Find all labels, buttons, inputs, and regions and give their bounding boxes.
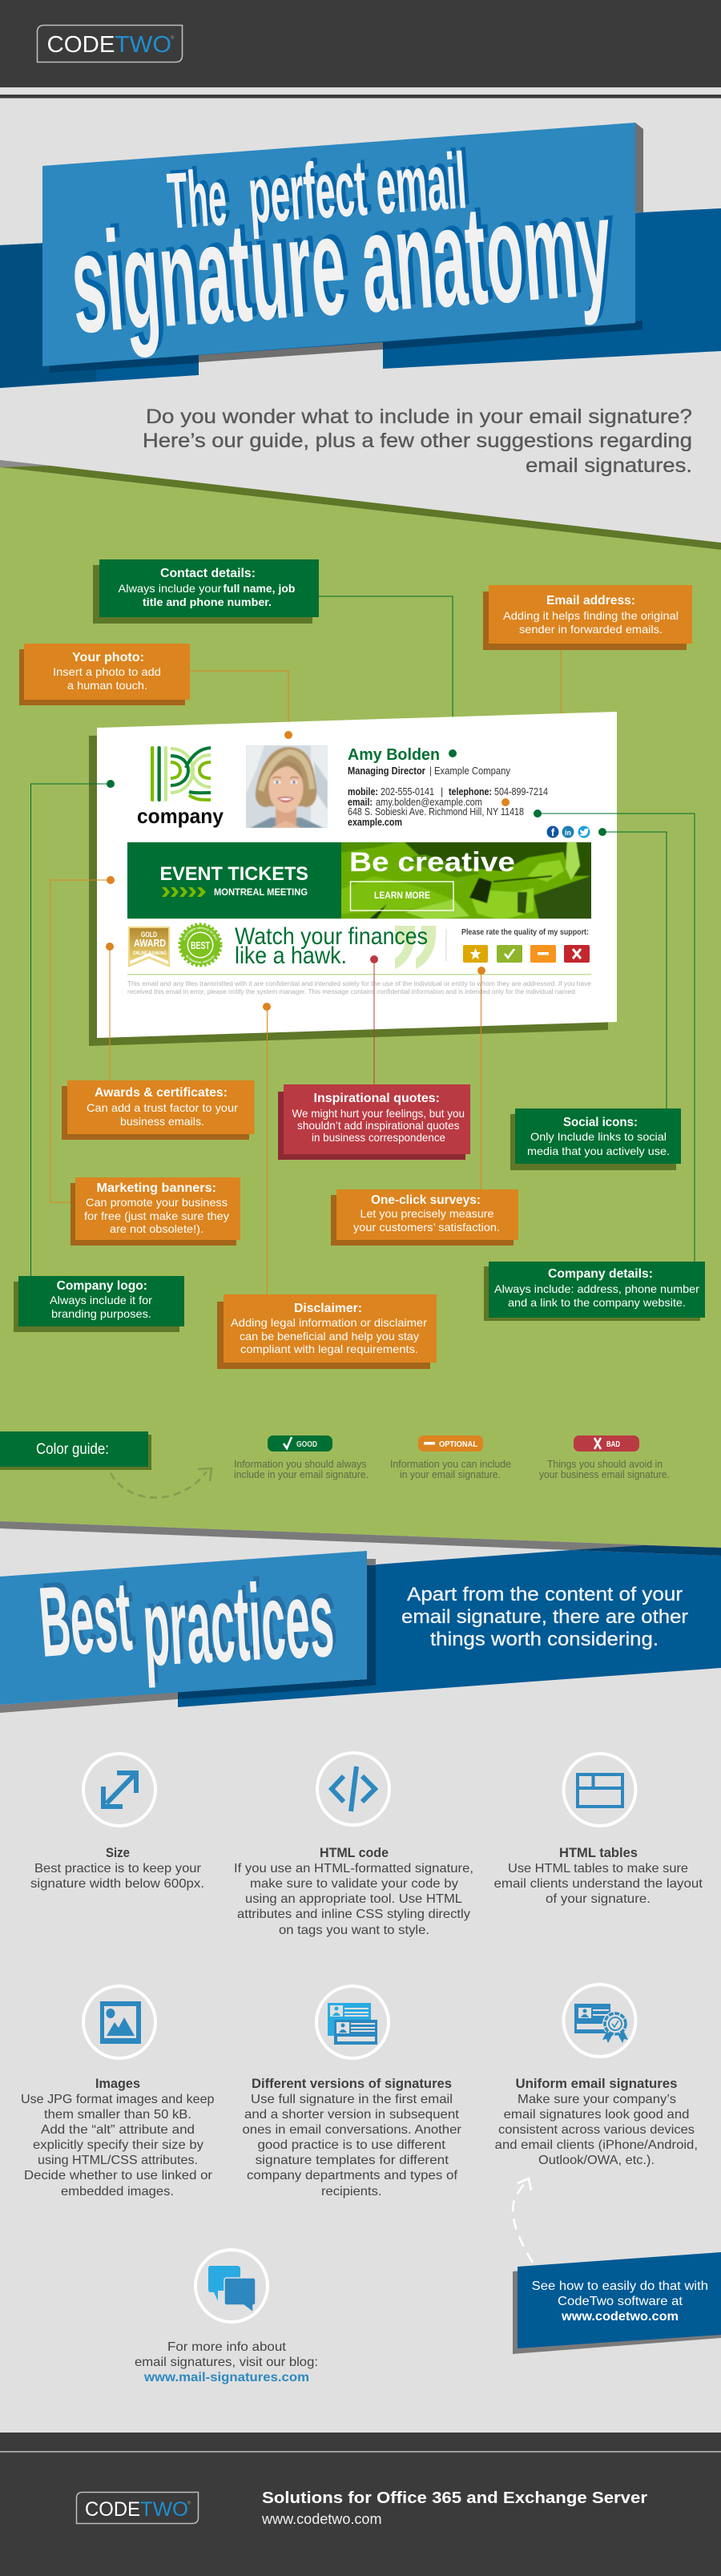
heading: Best practices: Best	[35, 1561, 135, 1678]
practice: images: embedded images.	[61, 2185, 174, 2198]
callout: company details: and a link to the company website.	[508, 1296, 686, 1309]
legend: bad	[539, 1435, 670, 1480]
callout: one-click surveys: One-click surveys:	[371, 1193, 481, 1207]
callout: contact details: Always include your	[119, 582, 222, 595]
callout: awards: Can add a trust factor to your	[87, 1101, 238, 1114]
contact details text	[348, 746, 548, 828]
best seal: BEST	[191, 939, 210, 951]
best practices banner: practices	[143, 1553, 340, 1684]
callout: company logo: branding purposes.	[51, 1307, 151, 1320]
callout: disclaimer: can be beneficial and help you stay	[240, 1330, 419, 1343]
icon: minus button	[530, 945, 556, 963]
practice: html code: on tags you want to style.	[279, 1924, 429, 1937]
contact details text: 648 S. Sobieski Ave. Richmond Hill, NY 11418	[348, 806, 524, 818]
disclaimer text: received this email in error, please notify the system manager. This message contains confidential information and is intended only for the individual named.	[127, 988, 577, 995]
callout: your photo: Insert a photo to add	[53, 665, 161, 678]
connector lines	[190, 596, 561, 802]
legend: bad: BAD	[606, 1439, 620, 1449]
callout: marketing banners: Marketing banners:	[96, 1181, 216, 1195]
social icons: f	[551, 826, 555, 838]
contact details text: |	[441, 786, 443, 797]
callout: inspirational quotes: Inspirational quotes:	[314, 1092, 440, 1105]
icon: speech bubbles	[195, 2250, 268, 2322]
practice: images: Images	[95, 2077, 140, 2091]
callout: disclaimer	[217, 1294, 437, 1369]
callout: social icons	[510, 1108, 681, 1170]
practice: html code	[234, 1753, 473, 1937]
callout: contact details: title and phone number.	[143, 596, 272, 608]
award ribbon: GOLD	[141, 931, 157, 939]
blog info: www.mail-signatures.com	[143, 2371, 309, 2384]
logo: CodeTwo footer: ®	[187, 2501, 191, 2506]
social icons	[546, 826, 590, 838]
callout: marketing banners	[70, 1177, 240, 1246]
marketing banner: Be creative	[349, 847, 515, 878]
practice: uniform signatures: Make sure your company’s	[518, 2093, 676, 2106]
icon: table	[564, 1754, 636, 1826]
practice: uniform signatures: Outlook/OWA, etc.).	[538, 2154, 655, 2167]
callout: see how: CodeTwo software at	[558, 2295, 683, 2308]
quote marks	[395, 926, 436, 969]
best seal	[178, 923, 223, 967]
callout: contact details: Contact details:	[160, 567, 256, 580]
practice: different versions	[242, 1986, 462, 2198]
callout: company logo: Always include it for	[50, 1294, 152, 1306]
callout: email address	[483, 585, 692, 650]
callout: company details: Company details:	[548, 1267, 653, 1281]
blog info	[135, 2250, 318, 2384]
callout: email address: Email address:	[546, 594, 635, 608]
icon: certificate	[564, 1984, 636, 2057]
practice: different versions: Different versions of signatures	[252, 2077, 452, 2091]
callout: disclaimer: compliant with legal requirements.	[240, 1343, 418, 1355]
callout: contact details: full name, job	[223, 582, 295, 595]
practice: uniform signatures: consistent across various devices	[498, 2123, 695, 2137]
legend: bad: your business email signature.	[539, 1469, 670, 1480]
practice: html tables: of your signature.	[546, 1892, 651, 1906]
intro text: best practices: things worth considering.	[430, 1629, 659, 1650]
award ribbon: AWARD	[134, 937, 166, 949]
intro text: best practices: email signature, there are other	[401, 1606, 688, 1628]
survey: Please rate the quality of my support:	[461, 928, 589, 937]
practice: images: using HTML/CSS attributes.	[38, 2154, 198, 2167]
practice: html code: HTML code	[320, 1846, 389, 1860]
logo: CodeTwo header: CODE	[46, 32, 115, 58]
practice: uniform signatures	[495, 1984, 698, 2167]
icon: size	[83, 1754, 155, 1826]
practice: uniform signatures: and email clients (iPhone/Android,	[495, 2138, 698, 2152]
practice: different versions: good practice is to use different	[258, 2138, 446, 2152]
legend: bad: Things you should avoid in	[547, 1459, 663, 1470]
legend: good: Information you should always	[234, 1459, 367, 1470]
callout: one-click surveys: your customers’ satisfaction.	[353, 1221, 500, 1233]
title text: The	[165, 152, 229, 245]
practice: size: Size	[106, 1846, 130, 1860]
contact details text: amy.bolden@example.com	[376, 797, 482, 808]
callout: marketing banners: for free (just make sure they	[84, 1209, 229, 1222]
contact details text: mobile:	[348, 786, 378, 797]
intro text: best practices	[401, 1584, 688, 1650]
callout: see how: See how to easily do that with	[532, 2279, 708, 2293]
logo: CodeTwo footer: TWO	[140, 2498, 188, 2521]
logo: CodeTwo footer	[77, 2493, 199, 2523]
inspirational quote text	[235, 923, 428, 969]
callout: email address: Adding it helps finding the original	[503, 609, 679, 622]
callout: your photo: Your photo:	[72, 651, 144, 664]
callout: contact details	[93, 559, 319, 624]
practice: different versions: company departments and types of	[247, 2169, 458, 2182]
intro text	[143, 406, 692, 477]
contact details text: 504-899-7214	[494, 786, 548, 797]
legend: good: GOOD	[296, 1439, 317, 1449]
callout: social icons: Social icons:	[563, 1116, 638, 1129]
award ribbon: ONLINE BANKING	[133, 951, 167, 956]
legend: optional: in your email signature.	[400, 1469, 501, 1480]
practice: size: Best practice is to keep your	[34, 1862, 202, 1875]
practice: images: Add the “alt” attribute and	[41, 2123, 195, 2137]
contact details text: Amy Bolden	[348, 746, 440, 764]
callout: one-click surveys: Let you precisely measure	[360, 1207, 494, 1220]
callout: see how	[513, 2252, 721, 2354]
callout: awards: business emails.	[120, 1115, 204, 1128]
legend: optional	[390, 1435, 511, 1480]
arrow: dashed white to uniform signatures	[513, 2178, 533, 2263]
logo: CodeTwo header	[37, 26, 183, 63]
callout: disclaimer: Adding legal information or disclaimer	[231, 1316, 427, 1329]
practice: html tables	[493, 1754, 703, 1906]
practice: images: them smaller than 50 kB.	[44, 2108, 191, 2122]
contact details text: email:	[348, 797, 373, 808]
practice: html code: using an appropriate tool. Use HTML	[245, 1892, 462, 1906]
disclaimer text: This email and any files transmitted with it are confidential and intended solely for the use of the individual or entity to whom they are addressed. If you have	[127, 980, 592, 987]
title text: The	[168, 149, 233, 242]
intro text: Do you wonder what to include in your email signature?	[146, 406, 692, 428]
practice: html tables: email clients understand the layout	[493, 1877, 703, 1891]
heading: Best practices: Best	[38, 1556, 139, 1674]
best seal: CUSTOMER SERVICE OF 2017	[183, 927, 218, 940]
photo	[244, 744, 329, 830]
callout: awards: Awards & certificates:	[95, 1086, 228, 1100]
practice: different versions: and a shorter version in subsequent	[244, 2108, 460, 2122]
callout: email address: sender in forwarded emails.	[519, 623, 663, 636]
practice: size: signature width below 600px.	[30, 1877, 204, 1891]
legend: good	[234, 1435, 369, 1480]
callout: disclaimer: Disclaimer:	[294, 1302, 362, 1315]
logo: CodeTwo footer: CODE	[85, 2498, 140, 2521]
practice: html tables: HTML tables	[559, 1846, 638, 1860]
inspirational quote text: Watch your finances	[235, 923, 428, 950]
contact details text: Managing Director	[348, 765, 425, 777]
footer	[0, 2433, 721, 2576]
callout: marketing banners: Can promote your business	[86, 1196, 228, 1209]
practice: size	[30, 1754, 204, 1891]
legend: optional: Information you can include	[390, 1459, 511, 1470]
best seal: IN FINANCIAL SERVICES	[186, 955, 215, 963]
signature card	[89, 712, 617, 1046]
callout: company logo: Company logo:	[57, 1279, 147, 1293]
connector dots	[106, 731, 606, 1011]
callout: inspirational quotes: We might hurt your feelings, but you	[292, 1107, 465, 1120]
connector lines lower	[30, 784, 695, 1294]
practice: uniform signatures: email signatures look good and	[504, 2108, 689, 2122]
callout: social icons: Only Include links to social	[530, 1130, 667, 1143]
inspirational quote text: like a hawk.	[235, 943, 347, 969]
callout: social icons: media that you actively use.	[527, 1145, 670, 1157]
blog info: email signatures, visit our blog:	[135, 2356, 318, 2369]
icon: code	[317, 1753, 389, 1825]
callout: inspirational quotes: in business correspondence	[312, 1131, 445, 1144]
callout: inspirational quotes: shouldn’t add inspirational quotes	[297, 1119, 460, 1132]
color guide label: Color guide:	[36, 1441, 109, 1458]
practice: uniform signatures: Uniform email signatures	[516, 2077, 678, 2091]
best practices banner	[0, 1545, 721, 1713]
icon: check button	[497, 945, 522, 963]
practice: html code: make sure to validate your code by	[250, 1877, 458, 1891]
contact details text: | Example Company	[429, 765, 511, 777]
practice: html code: attributes and inline CSS styling directly	[237, 1908, 470, 1921]
legend: optional: OPTIONAL	[439, 1439, 478, 1449]
award ribbon	[128, 927, 170, 967]
contact details text: telephone:	[449, 786, 492, 797]
icon: star button	[463, 945, 488, 963]
marketing banner: LEARN MORE	[374, 891, 430, 901]
intro text: email signatures.	[526, 454, 692, 477]
marketing banner: EVENT TICKETS	[160, 863, 308, 885]
heading: Best practices	[35, 1553, 340, 1689]
marketing banner	[127, 841, 593, 920]
best practices banner: practices	[140, 1558, 336, 1689]
color guide label	[0, 1431, 151, 1470]
logo: CodeTwo header: ®	[171, 35, 175, 41]
callout: your photo: a human touch.	[67, 679, 147, 692]
icon: image	[83, 1986, 155, 2058]
color guide	[0, 1431, 670, 1497]
practice: html code: If you use an HTML-formatted signature,	[234, 1862, 473, 1875]
legend: good: include in your email signature.	[234, 1469, 369, 1480]
practice: images: explicitly specify their size by	[33, 2138, 203, 2152]
footer: www.codetwo.com	[261, 2511, 381, 2527]
practice: different versions: recipients.	[321, 2185, 381, 2198]
callout: company logo	[14, 1276, 184, 1332]
callout: one-click surveys	[331, 1189, 518, 1246]
intro text: best practices: Apart from the content of your	[407, 1584, 683, 1605]
practice: different versions: Use full signature in the first email	[251, 2093, 453, 2106]
icon: cross button	[564, 945, 590, 963]
social icons: in	[565, 829, 571, 837]
callout: inspirational quotes	[278, 1084, 470, 1160]
contact details text: 202-555-0141	[381, 786, 434, 797]
disclaimer text	[127, 980, 592, 995]
arrow: dashed to legend	[111, 1468, 211, 1497]
logo: CodeTwo header: TWO	[115, 32, 171, 58]
company logo	[137, 746, 224, 828]
intro text: Here’s our guide, plus a few other suggestions regarding	[143, 430, 692, 452]
footer: Solutions for Office 365 and Exchange Server	[262, 2489, 647, 2507]
callout: company details	[484, 1262, 705, 1321]
icon: signature cards	[316, 1986, 389, 2058]
top header bar	[0, 0, 721, 98]
practice: images	[21, 1986, 215, 2198]
survey	[461, 928, 590, 963]
callout: company details: Always include: address, phone number	[494, 1282, 699, 1295]
contact details text: example.com	[348, 817, 402, 828]
title banner	[0, 123, 721, 388]
marketing banner: MONTREAL MEETING	[214, 886, 308, 898]
callout: awards	[62, 1080, 255, 1140]
blog info: For more info about	[167, 2340, 287, 2354]
company logo: company	[137, 804, 224, 828]
callout: marketing banners: are not obsolete!).	[110, 1222, 203, 1235]
practice: images: Use JPG format images and keep	[21, 2093, 215, 2106]
green anatomy section background	[0, 460, 721, 1550]
practice: different versions: ones in email conversations. Another	[242, 2123, 462, 2137]
practice: html tables: Use HTML tables to make sure	[508, 1862, 688, 1875]
callout: see how: www.codetwo.com	[561, 2310, 679, 2324]
practice: different versions: signature templates for different	[256, 2154, 449, 2167]
practice: images: Decide whether to use linked or	[24, 2169, 213, 2182]
callout: your photo	[19, 644, 190, 705]
